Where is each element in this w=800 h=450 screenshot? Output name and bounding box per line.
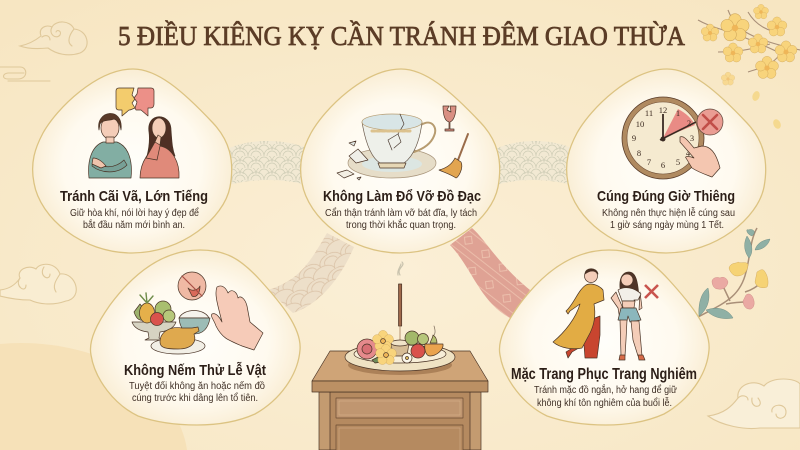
- heading 5: Mặc Trang Phục Trang Nghiêm: [511, 366, 697, 383]
- body 5: không khí tôn nghiêm của buổi lễ.: [537, 396, 672, 409]
- incense: [391, 262, 409, 356]
- cloud: top left: [20, 22, 87, 55]
- icon: clock: 10: [636, 119, 644, 129]
- icon: clock: 6: [661, 160, 665, 170]
- icon: clock: 5: [676, 157, 680, 167]
- icon: clock: 3: [690, 133, 694, 143]
- icon: clock: 1: [676, 108, 680, 118]
- offering plate: [345, 262, 455, 375]
- ribbon: left beige: [268, 233, 354, 313]
- body 4: cúng trước khi dâng lên tổ tiên.: [132, 392, 258, 404]
- panel shape 2: [301, 69, 500, 253]
- icon: clock: [622, 97, 704, 179]
- icon: woman: [140, 117, 179, 178]
- wave band: left: [226, 141, 310, 186]
- icon: red cross: [697, 109, 723, 135]
- wave band: right: [494, 141, 575, 186]
- heading 4: Không Nếm Thử Lễ Vật: [124, 362, 266, 379]
- panel shape 5: [499, 250, 709, 425]
- body 2: trong thời khắc quan trọng.: [346, 218, 456, 231]
- plum branch: [698, 4, 800, 130]
- panel: không làm đổ vỡ: [301, 69, 500, 253]
- fruits: [405, 326, 443, 358]
- icon: fruit tray: [132, 293, 176, 340]
- heading 1: Tránh Cãi Vã, Lớn Tiếng: [60, 188, 208, 205]
- altar table: [312, 351, 488, 450]
- body 2: Cẩn thận tránh làm vỡ bát đĩa, ly tách: [325, 207, 477, 219]
- icon: ao dai woman: [553, 269, 604, 358]
- ribbon: right pink: [450, 228, 530, 318]
- panel shape 1: [33, 69, 232, 253]
- icon: no tasting: [178, 272, 206, 300]
- icon: pointing hand: [680, 137, 720, 177]
- body 4: Tuyệt đối không ăn hoặc nếm đồ: [129, 380, 265, 392]
- icon: clock: 8: [637, 148, 641, 158]
- icon: broom: [439, 134, 468, 178]
- icon: clock: 12: [659, 105, 667, 115]
- scroll lines: [0, 67, 50, 81]
- icon: rice bowl: [179, 310, 210, 334]
- icon: clock: 11: [645, 108, 653, 118]
- panel: không nếm thử: [90, 250, 300, 425]
- icon: red x mark: [645, 285, 658, 298]
- panel: tránh cãi vã: [33, 69, 232, 253]
- heading 3: Cúng Đúng Giờ Thiêng: [597, 188, 735, 205]
- icon: speech bubbles: [116, 88, 154, 116]
- icon: stop hand: [211, 286, 263, 350]
- icon: clock: 4: [686, 148, 691, 158]
- icon: chicken: [151, 327, 205, 354]
- panel shape 3: [567, 69, 766, 253]
- panel: cúng đúng giờ: [567, 69, 766, 253]
- flower branch: [698, 228, 770, 319]
- icon: wine glass: [443, 106, 456, 131]
- icon: broken cup: [337, 114, 436, 180]
- hill: [0, 343, 187, 450]
- body 3: 1 giờ sáng ngày mùng 1 Tết.: [610, 219, 724, 231]
- cloud: lower right: [708, 379, 800, 428]
- icon: clock: 7: [647, 157, 651, 167]
- body 1: bắt đầu năm mới bình an.: [83, 218, 185, 231]
- body 1: Giữ hòa khí, nói lời hay ý đẹp để: [70, 207, 199, 219]
- title: 5 ĐIỀU KIÊNG KỴ CẦN TRÁNH ĐÊM GIAO THỪA: [118, 20, 685, 51]
- panel shape 4: [90, 250, 300, 425]
- cloud: left: [0, 264, 76, 304]
- flowers: [357, 330, 412, 364]
- panel: trang phục: [499, 250, 709, 425]
- icon: man: [89, 113, 131, 178]
- body 5: Tránh mặc đồ ngắn, hở hang để giữ: [534, 383, 677, 396]
- icon: clock: 9: [632, 133, 636, 143]
- icon: modern woman: [611, 272, 645, 360]
- heading 2: Không Làm Đổ Vỡ Đồ Đạc: [323, 188, 481, 205]
- icon: clock: 2: [687, 118, 691, 128]
- body 3: Không nên thực hiện lễ cúng sau: [602, 206, 735, 219]
